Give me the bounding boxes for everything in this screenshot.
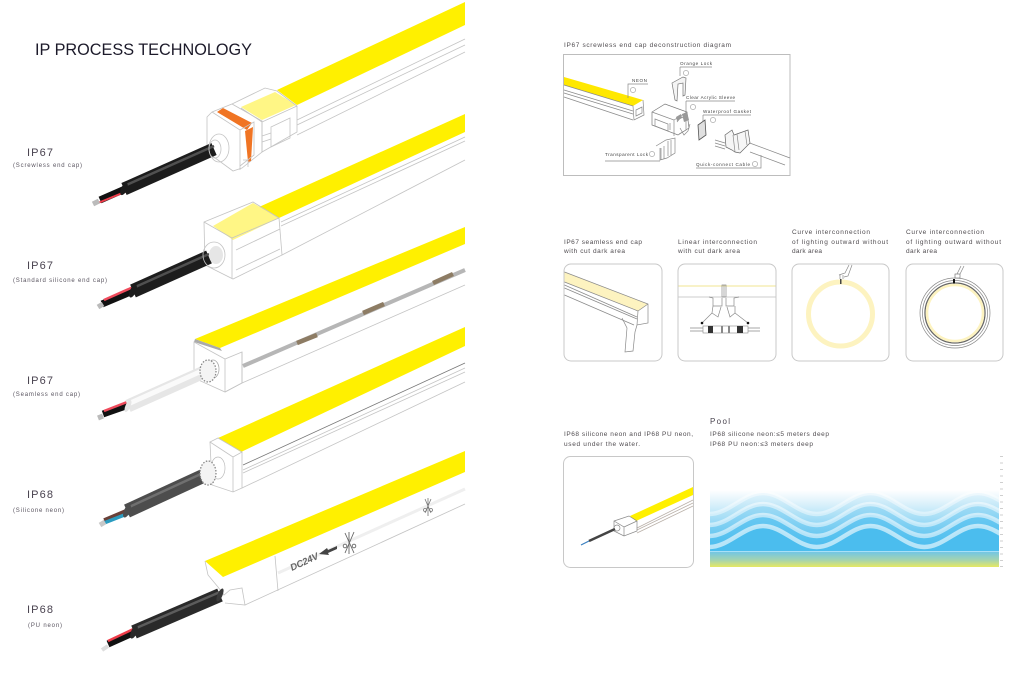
part: neon xyxy=(564,77,648,120)
title: IP PROCESS TECHNOLOGY xyxy=(35,40,252,59)
label: IP67 screwless end cap: (Screwless end cap) xyxy=(13,163,82,169)
caption: linear interconnection xyxy=(677,239,757,255)
caption: curve interconnection A xyxy=(792,229,888,255)
caption: seamless end cap: IP67 seamless end cap xyxy=(564,239,642,246)
caption: seamless end cap: with cut dark area xyxy=(563,248,625,255)
label: IP67 screwless end cap xyxy=(13,147,82,169)
label: IP68 PU neon: (PU neon) xyxy=(28,623,62,629)
panel: curve interconnection ring with housing xyxy=(906,264,1003,361)
caption: curve interconnection B xyxy=(906,229,1001,255)
caption: used under water xyxy=(564,431,693,448)
label: IP68 PU neon xyxy=(27,604,62,629)
caption: used under water: used under the water. xyxy=(564,441,640,448)
heading: pool depths xyxy=(710,417,829,448)
label: IP67 standard silicone end cap: IP67 xyxy=(27,260,53,272)
product: IP67 standard silicone end cap strip xyxy=(98,114,465,307)
part: neon: NEON xyxy=(632,78,647,83)
heading: pool depths: IP68 PU neon:≤3 meters deep xyxy=(710,441,813,448)
product: IP67 screwless end cap strip xyxy=(93,2,465,204)
caption: curve interconnection A: Curve interconnection xyxy=(792,229,870,236)
part: waterproof gasket: Waterproof Gasket xyxy=(703,109,752,114)
panel: linear interconnection with cut dark area xyxy=(678,264,776,361)
label: IP68 PU neon: IP68 xyxy=(27,604,53,616)
caption: curve interconnection A: of lighting outward without xyxy=(792,239,888,246)
text: DC24V marking: DC24V xyxy=(289,551,321,574)
product: IP67 seamless end cap strip xyxy=(98,227,465,418)
icon: direction arrow xyxy=(319,546,337,555)
label: IP67 screwless end cap: IP67 xyxy=(27,147,53,159)
product: IP68 silicone neon strip xyxy=(100,327,465,525)
label: IP67 standard silicone end cap xyxy=(13,260,107,284)
part: orange lock: Orange Lock xyxy=(680,61,713,66)
part: quick-connect cable: Quick-connect Cable xyxy=(696,162,750,167)
caption: seamless end cap xyxy=(563,239,642,255)
icon: cut mark scissors xyxy=(343,532,356,554)
label: IP68 silicone neon xyxy=(13,489,64,514)
label: IP68 silicone neon: IP68 xyxy=(27,489,53,501)
part: orange lock xyxy=(672,61,713,101)
part: transparent lock: Transparent Lock xyxy=(605,152,649,157)
label: IP67 seamless end cap: (Seamless end cap) xyxy=(13,392,80,398)
icon: second cut mark scissors xyxy=(424,498,432,516)
heading: pool depths: IP68 silicone neon:≤5 meters deep xyxy=(710,431,829,438)
label: IP68 silicone neon: (Silicone neon) xyxy=(13,508,64,514)
label: IP67 standard silicone end cap: (Standard silicone end cap) xyxy=(13,278,107,284)
caption: curve interconnection B: dark area xyxy=(906,248,937,255)
chart: pool water illustration xyxy=(710,456,1003,567)
caption: linear interconnection: with cut dark area xyxy=(677,248,740,255)
part: central housing xyxy=(652,104,690,136)
panel: underwater neon product xyxy=(564,456,694,568)
part: transparent lock xyxy=(605,138,675,161)
heading: deconstruction diagram: IP67 screwless end cap deconstruction diagram xyxy=(564,42,731,49)
part: clear acrylic sleeve xyxy=(686,95,735,113)
caption: curve interconnection B: Curve interconnection xyxy=(906,229,984,236)
caption: linear interconnection: Linear interconnection xyxy=(678,239,757,246)
part: quick-connect cable xyxy=(696,130,790,168)
heading: pool depths: Pool xyxy=(710,417,730,426)
part: clear acrylic sleeve: Clear Acrylic Sleeve xyxy=(686,95,735,100)
panel: curve interconnection ring xyxy=(792,264,889,361)
label: IP67 seamless end cap: IP67 xyxy=(27,375,53,387)
panel: deconstruction diagram xyxy=(564,54,790,176)
caption: curve interconnection B: of lighting outward without xyxy=(906,239,1001,246)
caption: used under water: IP68 silicone neon and IP68 PU neon, xyxy=(564,431,693,438)
panel: seamless end cap with cut dark area xyxy=(564,264,662,361)
caption: curve interconnection A: dark area xyxy=(792,248,822,255)
part: waterproof gasket xyxy=(698,109,752,140)
label: IP67 seamless end cap xyxy=(13,375,80,398)
product: IP68 PU neon strip xyxy=(102,451,465,650)
